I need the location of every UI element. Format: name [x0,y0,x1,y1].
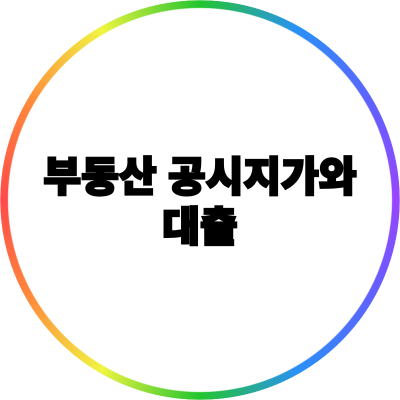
title: 대출 [162,204,238,250]
title: 부동산 공시지가와 [43,154,357,200]
title [43,154,357,250]
